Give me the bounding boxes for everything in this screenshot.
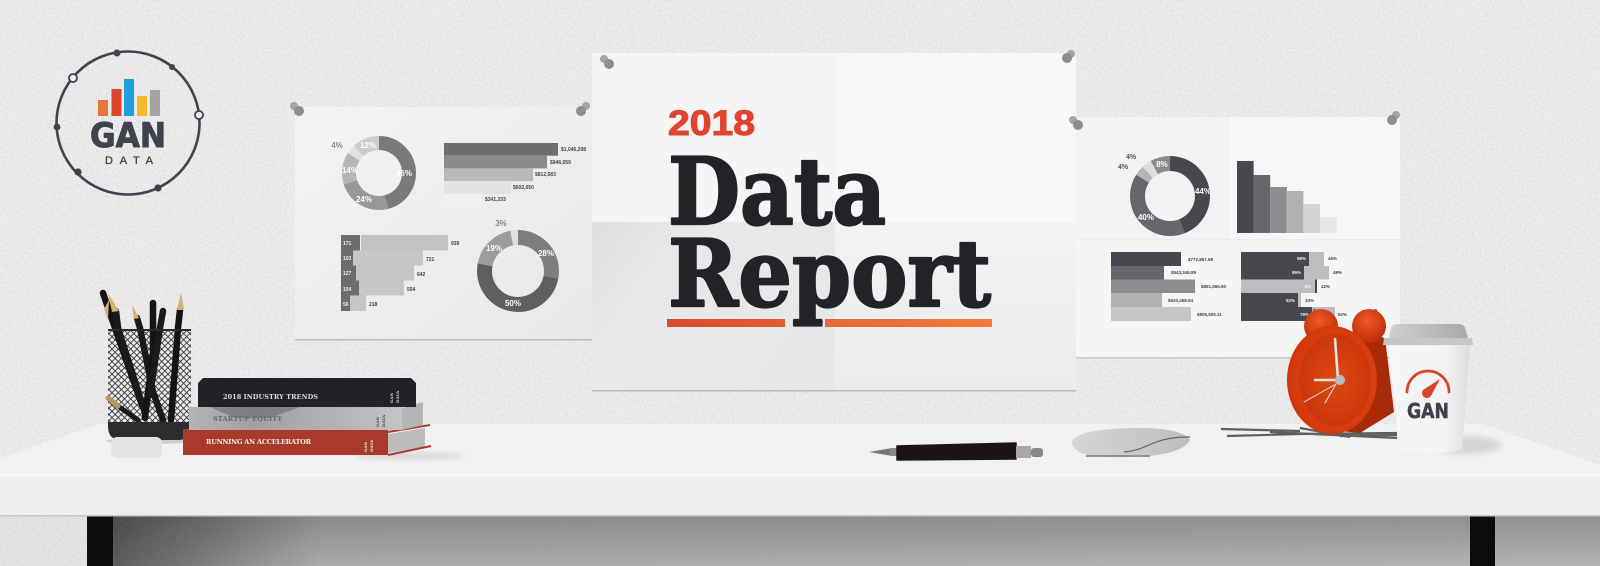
book shadow bbox=[355, 453, 465, 459]
book stack bbox=[183, 378, 431, 455]
bar chart: right bottom left: $772,867.68 bbox=[1188, 257, 1214, 262]
stacked bar chart: right bottom right: 98% bbox=[1297, 256, 1306, 261]
clock bells bbox=[1304, 309, 1386, 343]
title: Report: Report bbox=[668, 219, 991, 328]
funnel bar chart: left bottom: 103 bbox=[343, 256, 352, 262]
pencils bbox=[103, 293, 180, 420]
table leg: left bbox=[87, 516, 113, 566]
poster: main title bbox=[592, 53, 1076, 392]
funnel bar chart: left bottom: 154 bbox=[343, 287, 352, 293]
cup lid bbox=[1383, 324, 1473, 345]
logo subtitle: DATA bbox=[105, 155, 154, 167]
eraser bbox=[111, 437, 162, 458]
donut chart: left top: 24% bbox=[356, 195, 372, 204]
area below table bbox=[0, 516, 1600, 566]
funnel bar chart: left bottom: 171 bbox=[343, 241, 352, 247]
donut chart: right: 8% bbox=[1156, 160, 1168, 169]
book: startup equity: DATA bbox=[381, 414, 386, 427]
funnel bar chart: left bottom: 218 bbox=[369, 302, 378, 308]
stacked bar chart: right bottom right: 52% bbox=[1338, 312, 1347, 317]
book: 2018 industry trends: GAN bbox=[389, 392, 394, 403]
underline: right bbox=[825, 319, 992, 327]
donut chart: left top: 14% bbox=[342, 166, 358, 175]
funnel bar chart: left bottom: 642 bbox=[417, 272, 426, 278]
book: startup equity: STARTUP EQUITY bbox=[213, 415, 282, 423]
pen bbox=[869, 443, 1043, 460]
logo wordmark: GAN bbox=[90, 116, 166, 156]
mouse bbox=[1072, 428, 1190, 457]
stacked bar chart: right bottom right: 49% bbox=[1333, 270, 1342, 275]
book: running an accelerator: DATA bbox=[369, 439, 374, 452]
column chart: right bbox=[1237, 161, 1337, 233]
bar chart: left top: $946,059 bbox=[550, 160, 571, 166]
bar chart: left top: $1,046,208 bbox=[561, 147, 586, 153]
clock hands bbox=[1304, 339, 1345, 403]
book: 2018 industry trends: 2018 INDUSTRY TRENDS bbox=[223, 393, 318, 401]
clock face bbox=[1287, 326, 1377, 434]
table bbox=[0, 424, 1600, 516]
funnel bar chart: left bottom: 554 bbox=[407, 287, 416, 293]
bar chart: left top bbox=[444, 143, 586, 206]
paper clips bbox=[1221, 428, 1397, 438]
book: startup equity bbox=[189, 402, 423, 430]
donut chart: right: 44% bbox=[1195, 187, 1211, 196]
bar chart: right bottom left: $543,346.89 bbox=[1171, 270, 1197, 275]
donut chart: left top: 12% bbox=[360, 141, 376, 150]
stacked bar chart: right bottom right: 46% bbox=[1328, 256, 1337, 261]
cup wordmark: GAN bbox=[1407, 399, 1449, 423]
logo bars bbox=[98, 79, 160, 116]
year heading: 2018 bbox=[668, 104, 755, 143]
bar chart: right bottom left: $851,566.50 bbox=[1201, 284, 1227, 289]
stacked bar chart: right bottom right: 42% bbox=[1321, 284, 1330, 289]
donut chart: left top bbox=[331, 141, 412, 204]
stacked bar chart: right bottom right: 78% bbox=[1300, 312, 1309, 317]
icon: gauge bbox=[1407, 371, 1449, 398]
bar chart: right bottom left: $520,458.54 bbox=[1168, 298, 1194, 303]
stacked bar chart: right bottom right: 8% bbox=[1304, 284, 1311, 289]
donut chart: left top: 4% bbox=[331, 141, 343, 150]
donut chart: right: 4% bbox=[1126, 154, 1137, 161]
alarm clock bbox=[1287, 309, 1394, 434]
bar chart: left top: $812,583 bbox=[535, 172, 556, 178]
book: 2018 industry trends bbox=[198, 378, 416, 407]
funnel bar chart: left bottom: 939 bbox=[451, 241, 460, 247]
coffee cup bbox=[1383, 324, 1501, 454]
bar chart: left top: $602,050 bbox=[513, 185, 534, 191]
stacked bar chart: right bottom right: 33% bbox=[1305, 298, 1314, 303]
bar chart: right bottom left bbox=[1111, 252, 1227, 321]
book: running an accelerator: RUNNING AN ACCELERATOR bbox=[206, 438, 312, 446]
book: running an accelerator: GAN bbox=[363, 441, 368, 452]
title: Data: Data bbox=[668, 137, 886, 246]
poster: left charts bbox=[295, 107, 593, 340]
stacked bar chart: right bottom right: 52% bbox=[1286, 298, 1295, 303]
donut chart: left bottom: 28% bbox=[538, 249, 554, 258]
donut chart: left bottom: 3% bbox=[495, 219, 507, 228]
funnel bar chart: left bottom bbox=[341, 235, 460, 311]
donut chart: left bottom bbox=[484, 219, 554, 308]
donut chart: left bottom: 19% bbox=[486, 244, 502, 253]
logo: GAN Data bbox=[54, 50, 203, 194]
stacked bar chart: right bottom right bbox=[1241, 252, 1347, 321]
bar chart: right bottom left: $805,505.11 bbox=[1197, 312, 1222, 317]
poster: right charts bbox=[1076, 117, 1400, 358]
funnel bar chart: left bottom: 721 bbox=[426, 257, 435, 263]
book: startup equity: GAN bbox=[375, 416, 380, 427]
funnel bar chart: left bottom: 127 bbox=[343, 271, 352, 277]
donut chart: right bbox=[1118, 154, 1211, 228]
push pins bbox=[290, 50, 1400, 130]
book: running an accelerator bbox=[183, 425, 431, 455]
underline: left bbox=[667, 319, 785, 327]
donut chart: right: 40% bbox=[1138, 213, 1154, 222]
bar chart: left top: $341,333 bbox=[485, 197, 506, 203]
pencil holder bbox=[103, 292, 194, 444]
stacked bar chart: right bottom right: 86% bbox=[1292, 270, 1301, 275]
donut chart: left bottom: 50% bbox=[505, 299, 521, 308]
funnel bar chart: left bottom: 56 bbox=[343, 302, 349, 308]
donut chart: right: 4% bbox=[1118, 164, 1129, 171]
donut chart: left top: 46% bbox=[396, 169, 412, 178]
book: 2018 industry trends: DATA bbox=[395, 390, 400, 403]
table leg: right bbox=[1470, 516, 1495, 566]
